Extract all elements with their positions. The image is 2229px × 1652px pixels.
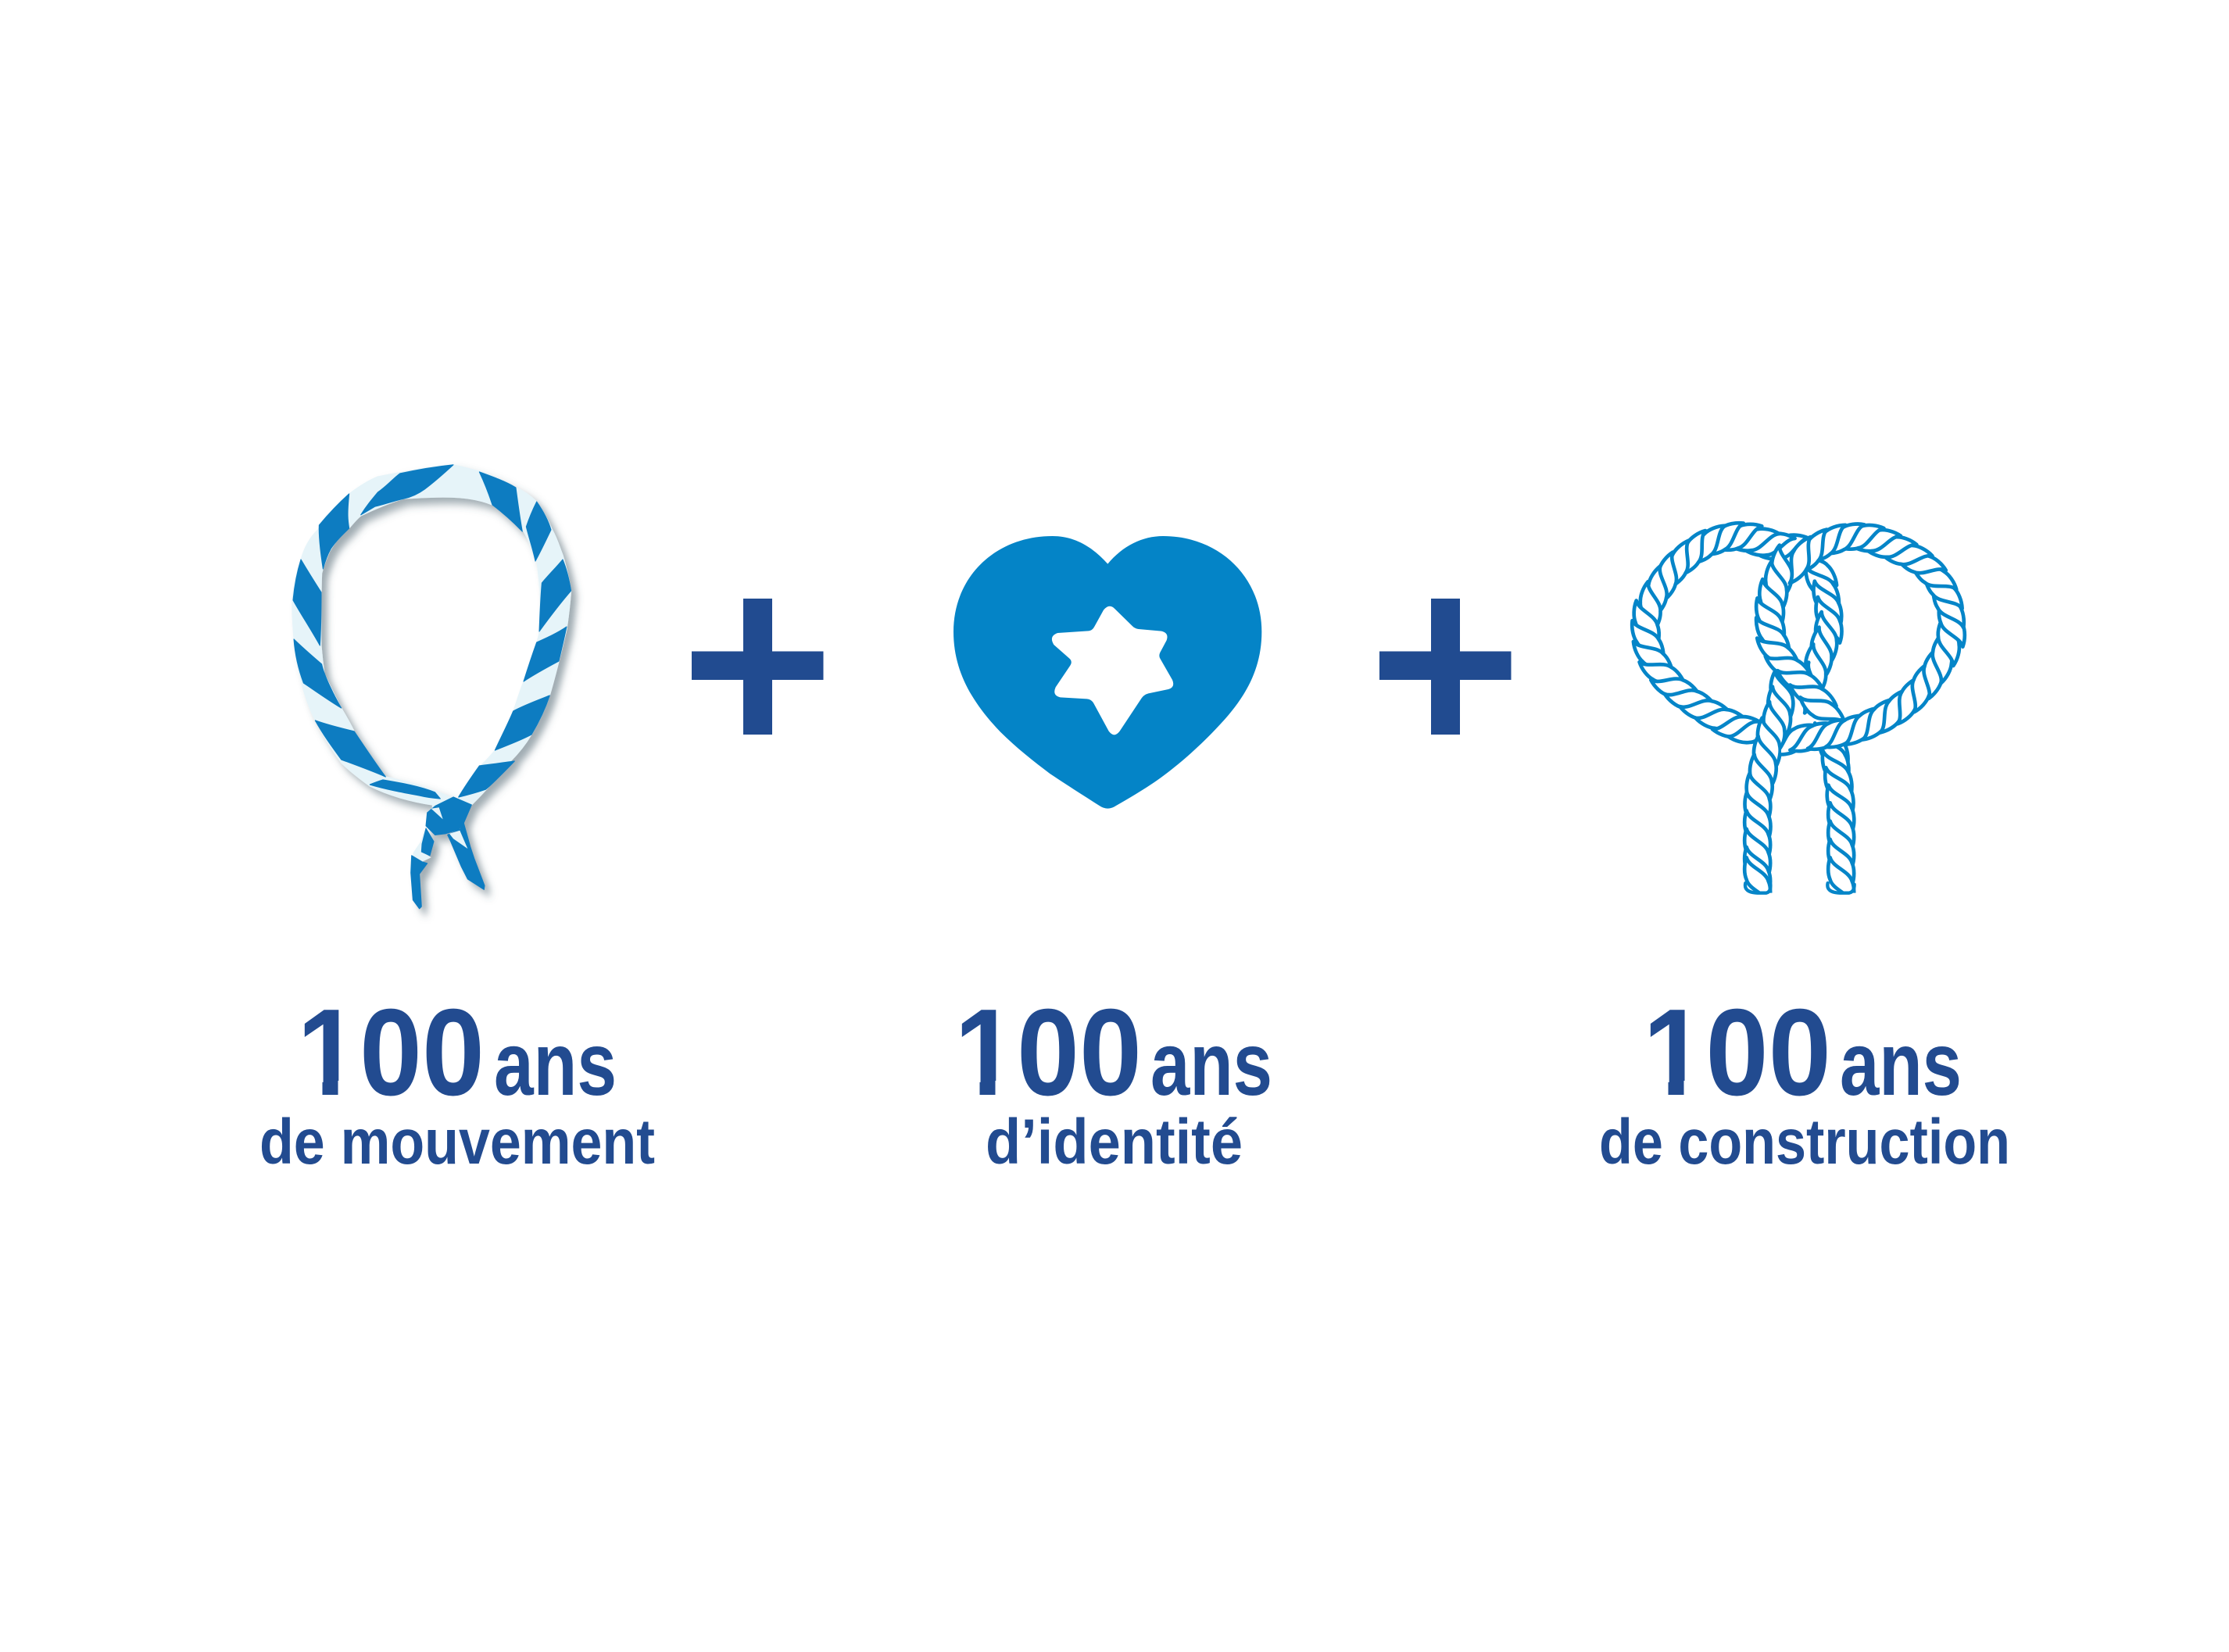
icon: heart with star <box>953 536 1261 809</box>
text block: 100 ans d'identité: 100 <box>954 984 1142 1121</box>
text block: 100 ans de construction: 100 <box>1643 984 1831 1121</box>
icon: striped scout neckerchief <box>292 465 571 909</box>
text block: 100 ans d'identité <box>954 984 1272 1178</box>
text block: 100 ans de construction: de construction <box>1599 1107 2010 1178</box>
icon: first plus sign <box>692 599 824 735</box>
text block: 100 ans de mouvement <box>259 984 655 1178</box>
text block: 100 ans d'identité: ans <box>1150 1014 1272 1114</box>
text block: 100 ans de construction: ans <box>1840 1014 1962 1114</box>
icon: rope knot <box>1630 521 1967 903</box>
text block: 100 ans de mouvement: de mouvement <box>259 1107 655 1178</box>
text block: 100 ans de mouvement: 100 <box>297 984 485 1121</box>
icon: second plus sign <box>1379 599 1512 735</box>
text block: 100 ans de mouvement: ans <box>494 1014 617 1114</box>
text block: 100 ans d'identité: d’identité <box>986 1107 1243 1178</box>
text block: 100 ans de construction <box>1599 984 2010 1178</box>
